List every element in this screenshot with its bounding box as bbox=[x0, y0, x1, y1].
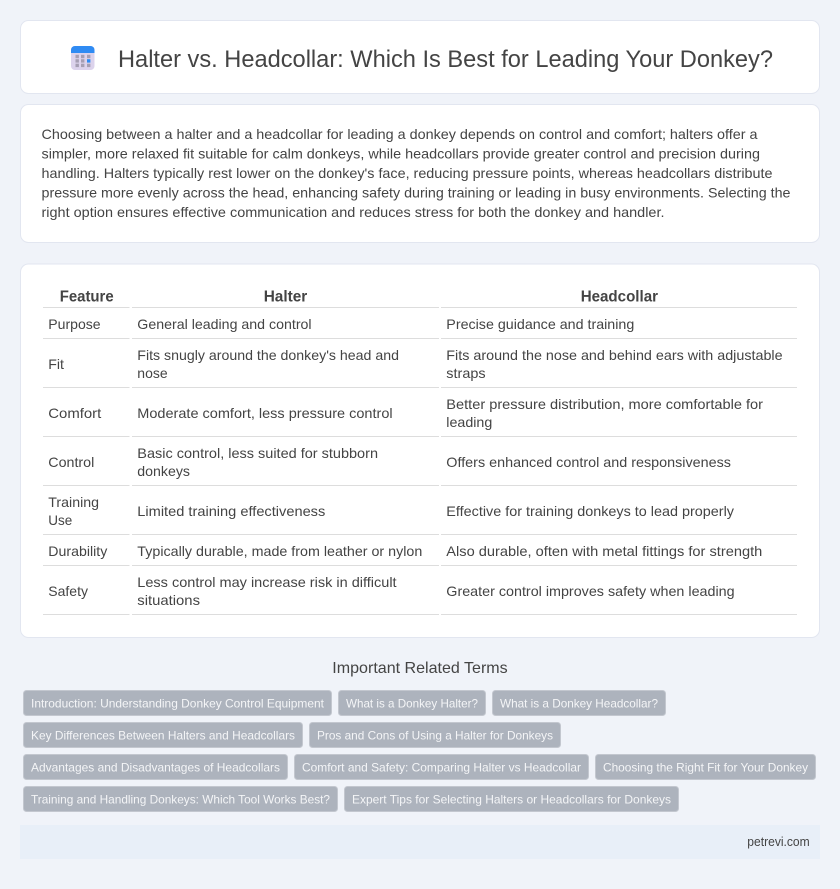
table row: purpose bbox=[43, 316, 797, 339]
title: Halter vs. Headcollar: Which Is Best for Leading Your Donkey? bbox=[118, 46, 773, 73]
table row: training use: Limited training effectiveness bbox=[137, 503, 325, 519]
table row: safety bbox=[43, 574, 797, 615]
table row: purpose: Purpose bbox=[48, 316, 101, 332]
tag: pros and cons: Pros and Cons of Using a Halter for Donkeys bbox=[317, 728, 553, 742]
table row: safety: Greater control improves safety when leading bbox=[446, 583, 735, 599]
table row: control: donkeys bbox=[137, 463, 190, 479]
footer source text: petrevi.com bbox=[747, 835, 810, 849]
table row: purpose: Precise guidance and training bbox=[446, 316, 634, 332]
table row: training use bbox=[43, 494, 797, 535]
tag: comfort and safety: Comfort and Safety: Comparing Halter vs Headcollar bbox=[302, 760, 581, 774]
table row: safety: Safety bbox=[48, 583, 88, 599]
tag: training and handling: Training and Handling Donkeys: Which Tool Works Best? bbox=[31, 792, 330, 806]
table row: fit: Fits snugly around the donkey's head and bbox=[137, 347, 399, 363]
table row: comfort: leading bbox=[446, 414, 492, 430]
table row: durability: Durability bbox=[48, 543, 107, 559]
tag: choosing the right fit: Choosing the Right Fit for Your Donkey bbox=[603, 760, 808, 774]
tag: training and handling bbox=[24, 786, 338, 812]
table row: training use: Use bbox=[48, 512, 72, 528]
table row: control: Offers enhanced control and responsiveness bbox=[446, 454, 731, 470]
table row: training use: Effective for training donkeys to lead properly bbox=[446, 503, 734, 519]
text block: introduction paragraph: right option ensures effective communication and reduces stress for both the donkey and handler. bbox=[42, 204, 664, 220]
table row: comfort bbox=[43, 396, 797, 437]
tag: what is a donkey halter bbox=[338, 690, 486, 716]
tag: expert tips: Expert Tips for Selecting Halters or Headcollars for Donkeys bbox=[352, 792, 671, 806]
text block: introduction paragraph: Choosing between a halter and a headcollar for leading a donkey depends on control and comfort; halters offer a bbox=[42, 126, 758, 142]
tag: what is a donkey headcollar bbox=[492, 690, 666, 716]
panel: header bbox=[20, 20, 820, 94]
table row: fit: nose bbox=[137, 365, 168, 381]
tag: comfort and safety bbox=[294, 754, 588, 780]
table row: durability: Also durable, often with metal fittings for strength bbox=[446, 543, 762, 559]
tag: key differences bbox=[24, 722, 302, 748]
table row: durability: Typically durable, made from leather or nylon bbox=[137, 543, 422, 559]
table row: control: Basic control, less suited for stubborn bbox=[137, 445, 378, 461]
icon: calendar grid bbox=[71, 46, 94, 70]
table row: control: Control bbox=[48, 454, 94, 470]
tag: introduction: Introduction: Understanding Donkey Control Equipment bbox=[31, 696, 325, 710]
table header row: Feature bbox=[60, 288, 114, 306]
tag: what is a donkey halter: What is a Donkey Halter? bbox=[346, 696, 478, 710]
table row: purpose: General leading and control bbox=[137, 316, 312, 332]
table header row: Halter bbox=[264, 288, 307, 306]
table header row bbox=[43, 288, 797, 308]
table row: fit: straps bbox=[446, 365, 486, 381]
text block: introduction paragraph: handling. Halters typically rest lower on the donkey's face, reducing pressure points, whereas headcollars distribute bbox=[42, 165, 773, 181]
table row: comfort: Comfort bbox=[48, 405, 101, 421]
panel: related term tags bbox=[24, 690, 816, 812]
text block: introduction paragraph: simpler, more relaxed fit suitable for calm donkeys, while headcollars provide greater control and precision during bbox=[42, 146, 760, 162]
table row: safety: Less control may increase risk in difficult bbox=[137, 574, 397, 590]
tag: introduction bbox=[24, 690, 332, 716]
tag: advantages and disadvantages bbox=[24, 754, 288, 780]
heading: important related terms: Important Related Terms bbox=[332, 660, 508, 677]
tag: what is a donkey headcollar: What is a Donkey Headcollar? bbox=[500, 696, 658, 710]
table row: fit bbox=[43, 347, 797, 388]
table row: control bbox=[43, 445, 797, 486]
table row: safety: situations bbox=[137, 592, 200, 608]
tag: pros and cons bbox=[310, 722, 560, 748]
table row: training use: Training bbox=[48, 494, 99, 510]
table row: fit: Fits around the nose and behind ears with adjustable bbox=[446, 347, 783, 363]
tag: advantages and disadvantages: Advantages and Disadvantages of Headcollars bbox=[31, 760, 280, 774]
tag: expert tips bbox=[344, 786, 678, 812]
table header row: Headcollar bbox=[581, 288, 658, 306]
text block: introduction paragraph: pressure more evenly across the head, enhancing safety during training or leading in busy environments. Selecting the bbox=[42, 184, 791, 200]
tag: key differences: Key Differences Between Halters and Headcollars bbox=[31, 728, 295, 742]
table row: durability bbox=[43, 543, 797, 566]
table row: fit: Fit bbox=[48, 356, 64, 372]
panel: introduction bbox=[20, 104, 820, 242]
table row: comfort: Better pressure distribution, more comfortable for bbox=[446, 396, 763, 412]
table row: comfort: Moderate comfort, less pressure control bbox=[137, 405, 393, 421]
tag: choosing the right fit bbox=[596, 754, 816, 780]
text block: introduction paragraph bbox=[42, 126, 791, 220]
panel: comparison table bbox=[20, 264, 820, 638]
footer bbox=[20, 825, 820, 859]
